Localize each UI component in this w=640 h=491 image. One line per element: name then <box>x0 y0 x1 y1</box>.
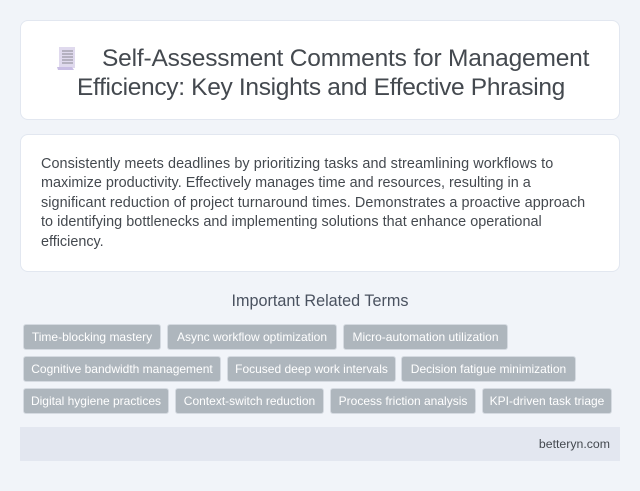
panel: self-assessment comment <box>20 134 620 272</box>
comment text: to identifying bottlenecks and implementing solutions that enhance operational <box>41 214 542 230</box>
footer source: betteryn.com <box>539 437 610 451</box>
heading: important related terms: Important Related Terms <box>232 292 408 310</box>
title card <box>20 20 620 120</box>
comment text: significant reduction of project turnaround times. Demonstrates a proactive approach <box>41 194 585 210</box>
term chips: Context-switch reduction <box>184 394 315 408</box>
term chips: KPI-driven task triage <box>490 394 604 408</box>
title <box>77 45 590 101</box>
term chips: Micro-automation utilization <box>352 330 499 344</box>
term chips: Decision fatigue minimization <box>411 362 566 376</box>
title: Efficiency: Key Insights and Effective Phrasing <box>77 74 565 101</box>
comment text: efficiency. <box>41 234 104 250</box>
term chips: Process friction analysis <box>339 394 467 408</box>
comment text <box>41 156 585 250</box>
icon: document <box>57 47 75 70</box>
comment text: maximize productivity. Effectively manages time and resources, resulting in a <box>41 175 531 191</box>
term chips: Digital hygiene practices <box>31 394 161 408</box>
term chips: Time-blocking mastery <box>32 330 152 344</box>
term chips <box>23 324 612 414</box>
term chips: Focused deep work intervals <box>235 362 388 376</box>
footer bar <box>20 427 620 461</box>
comment text: Consistently meets deadlines by prioritizing tasks and streamlining workflows to <box>41 156 553 172</box>
term chips: Cognitive bandwidth management <box>31 362 213 376</box>
term chips: Async workflow optimization <box>177 330 327 344</box>
title: Self-Assessment Comments for Management <box>102 45 589 72</box>
